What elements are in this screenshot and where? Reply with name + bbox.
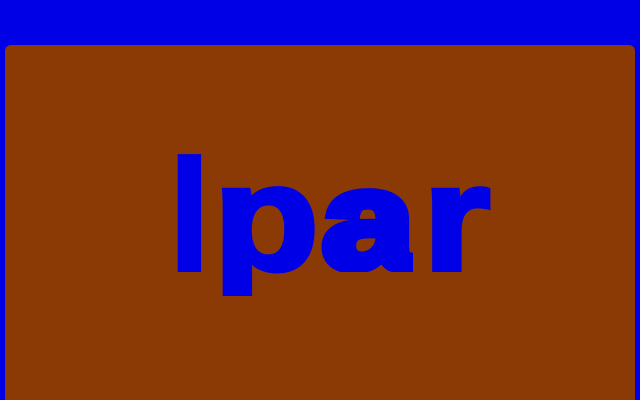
title: Ipar: p xyxy=(214,135,319,302)
title: Ipar: r xyxy=(423,135,490,302)
title: Ipar xyxy=(178,154,490,296)
title: Ipar: a xyxy=(322,141,416,298)
title: Ipar: I xyxy=(171,122,208,305)
